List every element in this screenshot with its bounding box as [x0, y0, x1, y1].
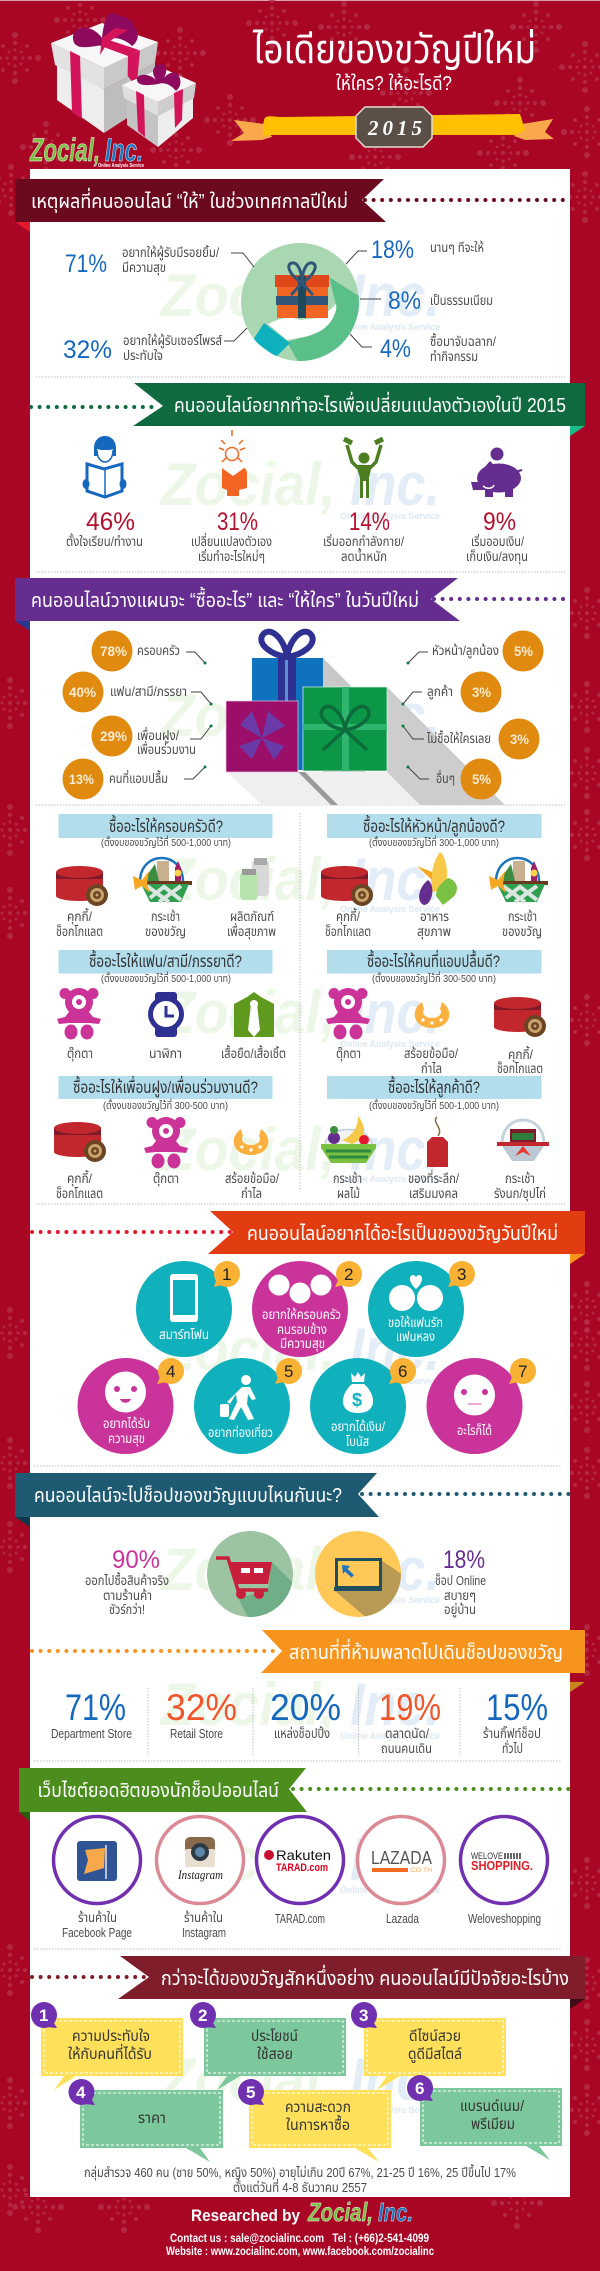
survey footnote: [84, 2163, 516, 2195]
wish 2: family happiness: 2: [344, 1265, 353, 1284]
stat: gift shops: ร้านกิ๊ฟท์ช็อป: [483, 1725, 541, 1741]
wish 6: money: $: [352, 1390, 362, 1410]
watermarks: Inc.: [350, 1316, 440, 1383]
wish 6: money: โบนัส: [346, 1434, 369, 1449]
site: Weloveshopping: [460, 1816, 548, 1926]
banner 4: desired gifts: คนออนไลน์อยากได้อะไรเป็นของขวัญวันปีใหม่: [247, 1222, 558, 1245]
panel: gifts for customers: [321, 1075, 549, 1201]
panel: gifts for boss/team: กระเช้า: [508, 909, 537, 924]
wish 4: happiness: 4: [166, 1362, 175, 1381]
wish 4: happiness: ความสุข: [108, 1431, 145, 1446]
recipient: other 5%: 5%: [472, 771, 492, 787]
panel: gifts for customers: กระเช้า: [333, 1171, 362, 1186]
factor 5: convenience: [238, 2079, 391, 2162]
stat: 14% exercise: [323, 508, 404, 564]
panel: gifts for boss/team: ของขวัญ: [502, 924, 542, 939]
icon: gift boxes: [51, 13, 196, 147]
factor 1: impression: ให้กับคนที่ได้รับ: [68, 2043, 152, 2063]
site: TARAD: TARAD.com: [276, 1862, 328, 1874]
wish 3: love: [368, 1261, 475, 1357]
watermarks: Zocial,: [159, 682, 336, 749]
recipient: customer 3%: ลูกค้า: [427, 684, 453, 699]
factor 4: price: 4: [76, 2083, 86, 2102]
stat: 8% tradition: 8%: [388, 287, 421, 315]
watermarks: Inc.: [350, 1116, 440, 1183]
factor 6: brand: พรีเมียม: [471, 2116, 515, 2133]
watermarks: Inc.: [350, 1536, 440, 1603]
panel: gifts for crush: ซื้ออะไรให้คนที่แอบปลื้มดี?: [367, 949, 500, 971]
watermarks: Online Analysis Service: [340, 1885, 440, 1895]
panel: gifts for crush: กำไล: [421, 1061, 442, 1076]
panel: gifts for family: ผลิตภัณฑ์: [230, 909, 274, 924]
watermarks: Inc.: [350, 682, 440, 749]
watermarks: Zocial,: [159, 846, 336, 913]
banner 3: what to buy and for whom: [15, 578, 570, 631]
recipient: partner 40%: [62, 672, 212, 712]
stat: 8% tradition: [360, 287, 493, 315]
panel: gifts for partner: (ตั้งงบของขวัญไว้ที่ 500-1,000 บาท): [101, 971, 231, 985]
stat: 71% want recipient to smile: อยากให้ผู้รับมีรอยยิ้ม/: [122, 244, 219, 260]
stat: 32% surprise: 32%: [63, 336, 112, 364]
stat: 4% activity: ซื้อมาจับฉลาก/: [430, 332, 496, 349]
logo: Zocial, Inc.: Zocial,: [29, 132, 100, 168]
stat: 9% saving: เริ่มออมเงิน/: [471, 533, 524, 549]
watermarks: Online Analysis Service: [340, 1174, 440, 1184]
footer credits: Researched by: [191, 2206, 300, 2225]
panel: gifts for family: คุกกี้/: [67, 907, 92, 924]
recipient: crush 13%: 13%: [69, 771, 94, 787]
panel: gifts for customers: รังนก/ซุปไก่: [494, 1186, 546, 1201]
site: Facebook page: [54, 1816, 140, 1940]
wish 1: smartphone: [136, 1261, 240, 1357]
factor 1: impression: [31, 2002, 183, 2090]
panel: gifts for customers: ของที่ระลึก/: [408, 1169, 459, 1186]
ribbon: 2015: [231, 107, 554, 147]
factor 2: usefulness: [190, 2002, 346, 2090]
panel: gifts for crush: สร้อยข้อมือ/: [404, 1046, 458, 1061]
site: Lazada: .CO.TH: [409, 1868, 432, 1874]
stat: 9% saving: [466, 508, 528, 564]
stat: retail store: Retail Store: [170, 1726, 223, 1741]
panel: gifts for crush: คุกกี้/: [508, 1045, 533, 1062]
icon: piggy bank: [471, 448, 522, 497]
factor 6: brand: แบรนด์เนม/: [460, 2098, 525, 2115]
watermarks: Online Analysis Service: [340, 1595, 440, 1605]
banner 8: purchase factors: [32, 1956, 585, 2009]
site: Lazada: [358, 1816, 444, 1926]
stat: 4% activity: 4%: [380, 335, 411, 363]
stat: 18% shop online: อยู่บ้าน: [444, 1602, 476, 1617]
watermarks: Online Analysis Service: [340, 904, 440, 914]
stat: department store: [51, 1687, 132, 1741]
watermarks: Zocial,: [159, 1536, 336, 1603]
wish 1: smartphone: 1: [222, 1265, 231, 1284]
stat: 9% saving: เก็บเงิน/ลงทุน: [466, 549, 528, 564]
recipient: crush 13%: คนที่แอบปลื้ม: [109, 769, 168, 786]
wish 5: travel: [194, 1358, 302, 1454]
wish 5: travel: อยากท่องเที่ยว: [208, 1423, 273, 1440]
recipient: boss 5%: 5%: [514, 643, 534, 659]
site: TARAD: Rakuten: [276, 1847, 331, 1863]
recipient: family 78%: 78%: [100, 643, 128, 659]
site: TARAD: [256, 1816, 344, 1926]
factor 4: price: [68, 2079, 223, 2162]
watermarks: Online Analysis Service: [340, 742, 440, 752]
logo: Zocial, Inc.: Online Analysis Service: [98, 163, 144, 169]
wish 7: anything: 7: [518, 1362, 527, 1381]
site: TARAD: TARAD.com: [275, 1911, 325, 1926]
watermarks: Online Analysis Service: [340, 511, 440, 521]
panel: gifts for partner: ซื้ออะไรให้แฟน/สามี/ภรรยาดี?: [89, 949, 242, 971]
stat: 18% shop online: สบายๆ: [444, 1588, 476, 1603]
stat: gift shops: 15%: [486, 1687, 548, 1728]
watermarks: Inc.: [350, 451, 440, 518]
panel: gifts for friends: คุกกี้/: [67, 1169, 92, 1186]
factor 2: usefulness: ใช้สอย: [257, 2046, 293, 2063]
icon: lightbulb person: [219, 430, 247, 496]
watermarks: [159, 262, 440, 2115]
site: Facebook page: Facebook Page: [62, 1925, 132, 1940]
panel: gifts for friends: ตุ๊กตา: [153, 1171, 179, 1186]
wish 6: money: [310, 1358, 416, 1454]
factor 1: impression: ความประทับใจ: [72, 2028, 150, 2045]
recipient: family 78%: ครอบครัว: [137, 643, 180, 658]
panel: gifts for crush: [326, 949, 546, 1076]
panel: gifts for family: ช็อกโกแลต: [56, 924, 103, 939]
stat: markets: 19%: [379, 1687, 441, 1728]
recipient: other 5%: อื่นๆ: [436, 769, 455, 786]
site: Instagram: ร้านค้าใน: [184, 1910, 223, 1925]
stat: 71% want recipient to smile: 71%: [65, 250, 107, 278]
panel: gifts for family: [56, 814, 276, 939]
panel: gifts for boss/team: ช็อกโกแลต: [325, 924, 371, 939]
panel: gifts for friends: (ตั้งงบของขวัญไว้ที่ 300-500 บาท): [103, 1098, 228, 1112]
watermarks: Online Analysis Service: [340, 322, 440, 332]
panel: gifts for customers: ผลไม้: [337, 1186, 360, 1201]
factor 3: design: ดูดีมีสไตล์: [408, 2046, 462, 2063]
panel: gifts for friends: สร้อยข้อมือ/: [225, 1171, 279, 1186]
site: Lazada: LAZADA: [371, 1848, 432, 1868]
watermarks: Online Analysis Service: [340, 1039, 440, 1049]
stat: 32% surprise: [63, 328, 247, 364]
wish 2: family happiness: มีความสุข: [280, 1336, 325, 1351]
wish 3: love: 3: [457, 1265, 466, 1284]
wish 3: love: แฟนหลง: [396, 1329, 435, 1344]
recipient: partner 40%: 40%: [69, 684, 97, 700]
banner 7: popular websites: [19, 1768, 570, 1822]
panel: gifts for customers: (ตั้งงบของขวัญไว้ที่ 500-1,000 บาท): [369, 1098, 499, 1112]
banner 5: how people shop: [15, 1473, 570, 1527]
panel: gifts for crush: ตุ๊กตา: [336, 1046, 361, 1061]
stat: 46% study/work: 46%: [86, 508, 135, 536]
recipient: friends 29%: [92, 716, 212, 757]
recipient: nobody 3%: 3%: [510, 731, 530, 747]
banner 2: what to change in 2015: [31, 383, 585, 436]
footer credits: Zocial,: [307, 2197, 373, 2227]
factor 1: impression: 1: [39, 2006, 48, 2025]
watermarks: Zocial,: [159, 2046, 336, 2113]
panel: gifts for friends: กำไล: [241, 1186, 262, 1201]
panel: gifts for crush: ช็อกโกแลต: [497, 1061, 543, 1076]
recipient: friends 29%: เพื่อนฝูง/: [137, 726, 179, 743]
recipient: friends 29%: 29%: [100, 728, 128, 744]
watermarks: Inc.: [350, 979, 440, 1046]
watermarks: Inc.: [350, 2046, 440, 2113]
stat: 90% shop in store: ออกไปซื้อสินค้าจริง: [85, 1571, 169, 1588]
banner 3: what to buy and for whom: คนออนไลน์วางแผนจะ “ซื้ออะไร” และ “ให้ใคร” ในวันปีใหม่: [31, 586, 419, 612]
wish 4: happiness: [78, 1358, 184, 1454]
stat: retail store: 32%: [166, 1687, 237, 1728]
panel: gifts for family: เพื่อสุขภาพ: [227, 922, 276, 939]
stat: 14% exercise: ลดน้ำหนัก: [341, 547, 387, 564]
panel: gifts for partner: ตุ๊กตา: [67, 1046, 93, 1061]
factor 4: price: ราคา: [138, 2110, 166, 2127]
survey footnote: กลุ่มสำรวจ 460 คน (ชาย 50%, หญิง 50%) อายุไม่เกิน 20ปี 67%, 21-25 ปี 16%, 25 ปีขึ้นไป 17%: [84, 2163, 516, 2180]
panel: gifts for friends: ซื้ออะไรให้เพื่อนฝูง/เพื่อนร่วมงานดี?: [73, 1075, 258, 1099]
recipient: boss 5%: หัวหน้า/ลูกน้อง: [432, 643, 499, 658]
stat: markets: [379, 1687, 441, 1756]
wish 1: smartphone: สมาร์ทโฟน: [159, 1327, 209, 1342]
panel: gifts for partner: เสื้อยืด/เสื้อเชิ้ต: [221, 1044, 286, 1061]
stat: 90% shop in store: ชัวร์กว่า!: [109, 1602, 145, 1617]
site: Instagram: Instagram: [177, 1867, 223, 1882]
recipient: family 78%: [92, 630, 206, 672]
panel: gifts for family: (ตั้งงบของขวัญไว้ที่ 500-1,000 บาท): [101, 835, 231, 849]
factor 2: usefulness: ประโยชน์: [251, 2028, 298, 2045]
recipient: customer 3%: 3%: [472, 684, 492, 700]
panel: gifts for boss/team: ซื้ออะไรให้หัวหน้า/ลูกน้องดี?: [363, 814, 505, 838]
panel: gifts for customers: ซื้ออะไรให้ลูกค้าดี?: [388, 1075, 480, 1099]
stat: 14% exercise: 14%: [349, 508, 390, 536]
banner 1: reasons to give: [15, 179, 570, 232]
survey footnote: ตั้งแต่วันที่ 4-8 ธันวาคม 2557: [233, 2178, 367, 2195]
stat: 90% shop in store: 90%: [112, 1546, 160, 1574]
panel: gifts for boss/team: สุขภาพ: [417, 924, 451, 939]
ribbon: 2015: 2015: [367, 116, 422, 140]
watermarks: Online Analysis Service: [340, 1731, 440, 1741]
stat: gift shops: [483, 1687, 548, 1756]
banner 6: places to shop: [32, 1630, 585, 1692]
recipient: crush 13%: [62, 758, 206, 800]
footer credits: Website : www.zocialinc.com, www.facebook.com/zocialinc: [166, 2244, 434, 2258]
watermarks: Zocial,: [159, 1671, 336, 1738]
factor 5: convenience: ความสะดวก: [285, 2099, 351, 2116]
site: Instagram: Instagram: [182, 1925, 226, 1940]
stat: 32% surprise: อยากให้ผู้รับเซอร์ไพรส์: [123, 333, 222, 348]
recipient: customer 3%: [402, 672, 502, 712]
footer credits: Inc.: [378, 2197, 413, 2227]
stat: gift shops: ทั่วไป: [502, 1740, 523, 1756]
stat: 71% want recipient to smile: มีความสุข: [122, 260, 166, 275]
wish 5: travel: 5: [284, 1362, 293, 1381]
banner 1: reasons to give: เหตุผลที่คนออนไลน์ “ให้” ในช่วงเทศกาลปีใหม่: [31, 187, 348, 213]
wish 6: money: อยากได้เงิน/: [331, 1419, 385, 1434]
factor 6: brand: 6: [415, 2079, 424, 2098]
banner 4: desired gifts: [32, 1211, 585, 1264]
recipient: partner 40%: แฟน/สามี/ภรรยา: [110, 684, 187, 699]
stat: 31% change self: 31%: [217, 508, 258, 536]
watermarks: Inc.: [350, 1671, 440, 1738]
wish 6: money: 6: [398, 1362, 407, 1381]
panel: gifts for boss/team: คุกกี้/: [336, 907, 360, 924]
panel: gifts for friends: [54, 1075, 279, 1201]
factor 6: brand: [407, 2075, 562, 2160]
stat: department store: 71%: [65, 1687, 126, 1728]
stat: 46% study/work: [66, 508, 143, 549]
factor 3: design: [351, 2002, 506, 2090]
panel: gifts for friends: ช็อกโกแลต: [56, 1186, 103, 1201]
subtitle: ให้ใคร? ให้อะไรดี?: [336, 72, 452, 95]
watermarks: Zocial,: [159, 979, 336, 1046]
wish 3: love: ขอให้แฟนรัก: [388, 1315, 443, 1330]
panel: gifts for customers: เสริมมงคล: [409, 1186, 458, 1201]
watermarks: Zocial,: [159, 1316, 336, 1383]
stat: 18% shop online: ช็อป Online: [435, 1573, 486, 1588]
stat: shopping areas: แหล่งช็อปปิ้ง: [274, 1725, 330, 1741]
stat: 90% shop in store: [85, 1546, 169, 1617]
stat: 31% change self: เปลี่ยนแปลงตัวเอง: [191, 532, 272, 549]
panel: gifts for family: ของขวัญ: [145, 924, 186, 939]
factor 3: design: 3: [359, 2006, 368, 2025]
recipient: nobody 3%: [402, 718, 540, 760]
stat: shopping areas: 20%: [270, 1687, 341, 1728]
logo: Zocial, Inc.: Inc.: [105, 132, 143, 168]
panel: gifts for family: ซื้ออะไรให้ครอบครัวดี?: [109, 814, 223, 836]
stat: 4% activity: ทำกิจกรรม: [430, 349, 478, 364]
icon: person reading: [82, 436, 126, 497]
stat: 18% rarely give: 18%: [371, 236, 414, 264]
footer credits: Contact us : sale@zocialinc.com Tel : (+66)2-541-4099: [170, 2231, 429, 2245]
stat: markets: ถนนคนเดิน: [381, 1741, 432, 1756]
watermarks: Zocial,: [159, 451, 336, 518]
stat: 8% tradition: เป็นธรรมเนียม: [430, 293, 493, 308]
stat: 31% change self: เริ่มทำอะไรใหม่ๆ: [198, 548, 265, 564]
chart: gift-in-hand donut: [241, 243, 365, 365]
panel: gifts for boss/team: (ตั้งงบของขวัญไว้ที่ 300-1,000 บาท): [369, 835, 499, 849]
site: Lazada: Lazada: [386, 1911, 420, 1926]
panel: gifts for boss/team: [321, 814, 548, 939]
watermarks: Inc.: [350, 1826, 440, 1893]
factor 2: usefulness: 2: [198, 2006, 207, 2025]
wish 7: anything: [426, 1358, 536, 1454]
factor 3: design: ดีไซน์สวย: [409, 2028, 461, 2045]
stat: 71% want recipient to smile: [65, 244, 254, 278]
factor 5: convenience: 5: [246, 2083, 255, 2102]
wish 2: family happiness: [252, 1261, 362, 1357]
stat: 18% shop online: 18%: [443, 1546, 485, 1574]
panel: gifts for boss/team: อาหาร: [420, 909, 449, 924]
icon: laptop: [315, 1531, 401, 1617]
stat: 18% rarely give: นานๆ ทีจะให้: [430, 240, 484, 255]
icon: shopping cart: [207, 1531, 293, 1617]
factor 5: convenience: ในการหาซื้อ: [286, 2114, 350, 2134]
site: Instagram: [156, 1816, 244, 1940]
recipient: friends 29%: เพื่อนร่วมงาน: [137, 740, 196, 757]
watermarks: Zocial,: [159, 1826, 336, 1893]
stat: 18% shop online: [435, 1546, 486, 1617]
site: Weloveshopping: SHOPPING.: [471, 1858, 533, 1873]
panel: gifts for partner: [57, 949, 286, 1061]
title: ไอเดียของขวัญปีใหม่: [252, 28, 536, 72]
site: Facebook page: ร้านค้าใน: [78, 1910, 117, 1925]
stat: 32% surprise: ประทับใจ: [123, 348, 163, 363]
site: Weloveshopping: WELOVE: [471, 1851, 503, 1861]
recipient: other 5%: [406, 758, 502, 800]
watermarks: Online Analysis Service: [340, 2105, 440, 2115]
stat: 46% study/work: ตั้งใจเรียน/ทำงาน: [66, 533, 143, 549]
wish 4: happiness: อยากได้รับ: [103, 1416, 150, 1431]
recipient: nobody 3%: ไม่ซื้อให้ใครเลย: [426, 729, 491, 746]
stat: 9% saving: 9%: [483, 508, 516, 536]
stat: 4% activity: [350, 332, 496, 364]
panel: gifts for crush: (ตั้งงบของขวัญไว้ที่ 300-500 บาท): [372, 971, 496, 985]
stat: 31% change self: [191, 508, 272, 564]
wish 2: family happiness: อยากให้ครอบครัว: [262, 1307, 341, 1322]
panel: gifts for customers: กระเช้า: [505, 1171, 535, 1186]
site: Weloveshopping: Weloveshopping: [468, 1911, 541, 1926]
panel: gifts for family: กระเช้า: [151, 909, 180, 924]
stat: 90% shop in store: ตามร้านค้า: [103, 1588, 152, 1603]
recipient: boss 5%: [406, 630, 544, 672]
watermarks: Inc.: [350, 846, 440, 913]
watermarks: Zocial,: [159, 262, 336, 329]
icon: person lifting weights: [344, 439, 383, 498]
wish 2: family happiness: คนรอบข้าง: [277, 1322, 327, 1337]
footer credits: [166, 2197, 434, 2258]
wish 7: anything: อะไรก็ได้: [457, 1423, 492, 1438]
watermarks: Zocial,: [159, 1116, 336, 1183]
banner 7: popular websites: เว็บไซต์ยอดฮิตของนักช็อปออนไลน์: [38, 1780, 279, 1802]
banner 6: places to shop: สถานที่ที่ห้ามพลาดไปเดินช็อปของขวัญ: [289, 1638, 563, 1664]
watermarks: Online Analysis Service: [340, 1376, 440, 1386]
stat: 18% rarely give: [346, 236, 484, 264]
stat: markets: ตลาดนัด/: [385, 1726, 429, 1741]
illustration: stacked gifts: [226, 632, 505, 805]
panel: gifts for partner: นาฬิกา: [149, 1046, 182, 1061]
banner 5: how people shop: คนออนไลน์จะไปช็อปของขวัญแบบไหนกันนะ?: [34, 1485, 342, 1507]
watermarks: Inc.: [350, 262, 440, 329]
stat: 14% exercise: เริ่มออกกำลังกาย/: [323, 533, 404, 549]
stat: department store: Department Store: [51, 1726, 132, 1741]
